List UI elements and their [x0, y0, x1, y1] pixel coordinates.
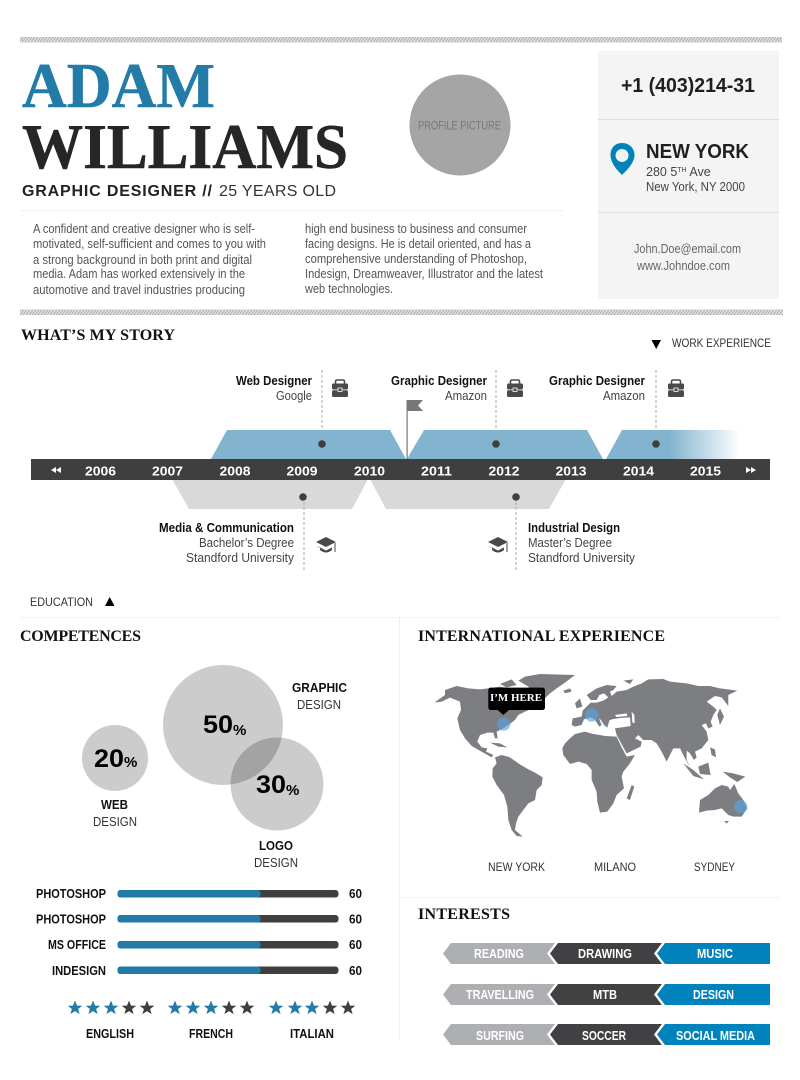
world map [434, 674, 747, 837]
job: graphic designer 2: Amazon [603, 389, 645, 403]
education: media and communication: Bachelor’s Degree [199, 536, 294, 550]
city: NEW YORK [646, 141, 750, 163]
icon: briefcase [507, 380, 523, 397]
skill bars: PHOTOSHOP [36, 912, 106, 926]
interests row 3: SURFING [476, 1029, 524, 1043]
education: industrial design: Master’s Degree [528, 536, 612, 550]
bubble chart: competences: GRAPHIC [292, 681, 347, 695]
map labels [488, 860, 735, 874]
intro text right column: facing designs. He is detail oriented, and has a [305, 237, 531, 251]
map labels: MILANO [594, 860, 636, 874]
intro text right column: comprehensive understanding of Photoshop, [305, 252, 527, 266]
heading: competences: COMPETENCES [20, 628, 141, 645]
language ratings: ENGLISH [86, 1027, 134, 1041]
job: web designer: Google [276, 389, 312, 403]
profile picture placeholder [410, 74, 510, 176]
interests row 1 [443, 943, 770, 964]
bubble chart: competences: 30 [256, 771, 286, 799]
bubble chart: competences [82, 665, 347, 870]
job: graphic designer 1: Amazon [445, 389, 487, 403]
interests row 2: DESIGN [693, 988, 734, 1002]
icon: graduation cap [316, 537, 336, 552]
year bar: 2013 [556, 464, 586, 478]
language ratings: FRENCH [189, 1027, 233, 1041]
job: web designer [236, 374, 312, 403]
icon: briefcase [668, 380, 684, 397]
job: graphic designer 2 [549, 374, 645, 403]
top hatched rule [20, 37, 782, 42]
street address: Ave [687, 165, 711, 179]
intro text left column: a strong background in both print and digital [33, 253, 252, 267]
bubble chart: competences: % [233, 722, 246, 739]
intro text right column [304, 222, 543, 296]
year bar: 2010 [354, 464, 385, 478]
street address: 280 5 [646, 165, 677, 179]
interests row 2 [443, 984, 770, 1005]
job title: GRAPHIC DESIGNER // [22, 183, 213, 200]
eurasia [572, 679, 737, 768]
header: name and title [22, 50, 348, 200]
bubble chart: competences: DESIGN [254, 856, 298, 870]
australia [699, 784, 747, 817]
year bar: 2007 [152, 464, 183, 478]
job: web designer: Web Designer [236, 374, 312, 388]
intro text left column: motivated, self-sufficient and comes to you with [33, 237, 266, 251]
bubble chart: competences: DESIGN [297, 698, 341, 712]
skill bars: INDESIGN [52, 964, 106, 978]
interests row 2: TRAVELLING [466, 988, 534, 1002]
legend: education: EDUCATION [30, 595, 93, 609]
interests row 2: MTB [593, 988, 617, 1002]
email: John.Doe@email.com [634, 242, 741, 256]
year bar: 2012 [488, 464, 520, 478]
heading: international experience: INTERNATIONAL EXPERIENCE [418, 628, 665, 645]
skill bars: 60 [349, 938, 362, 952]
bubble chart: competences: % [286, 782, 299, 799]
interests row 3 [443, 1024, 770, 1045]
phone number: +1 (403)214-31 [621, 75, 755, 97]
profile picture placeholder: PROFILE PICTURE [418, 118, 501, 132]
education: industrial design [528, 521, 636, 565]
icon: graduation cap [488, 537, 508, 552]
language ratings: ITALIAN [290, 1027, 334, 1041]
callout: I'm here: I’M HERE [490, 693, 542, 704]
timeline [31, 370, 770, 571]
year bar: 2009 [286, 464, 318, 478]
interests row 1: DRAWING [578, 947, 632, 961]
language ratings [68, 1000, 355, 1041]
last name: WILLIAMS [22, 111, 348, 182]
bubble chart: competences: % [124, 754, 137, 771]
skill bars [36, 887, 362, 978]
map labels: SYDNEY [694, 860, 735, 874]
website: www.Johndoe.com [636, 259, 730, 273]
year bar: 2006 [85, 464, 116, 478]
north america [434, 686, 533, 757]
heading: interests: INTERESTS [418, 906, 510, 923]
bubble chart: competences: DESIGN [93, 815, 137, 829]
intro text left column: A confident and creative designer who is self- [33, 222, 255, 236]
year bar: 2011 [421, 464, 452, 478]
intro text left column: automotive and travel industries producing [33, 283, 245, 297]
second hatched rule [20, 310, 783, 315]
job: graphic designer 2: Graphic Designer [549, 374, 645, 388]
year bar: 2008 [220, 464, 250, 478]
skill bars: 60 [349, 912, 362, 926]
education: media and communication: Standford University [186, 551, 295, 565]
year bar: 2015 [690, 464, 721, 478]
interests row 3: SOCCER [582, 1029, 626, 1043]
work periods [211, 430, 740, 459]
city address: New York, NY 2000 [646, 180, 745, 194]
icon: location pin [610, 143, 634, 175]
intro text right column: web technologies. [304, 282, 393, 296]
intro text right column: Indesign, Dreamweaver, Illustrator and the latest [305, 267, 543, 281]
bubble chart: competences: LOGO [259, 839, 293, 853]
panel: contact details [598, 51, 779, 299]
education: media and communication: Media & Communication [159, 521, 294, 535]
first name: ADAM [22, 50, 215, 121]
south america [492, 755, 543, 837]
skill bars: PHOTOSHOP [36, 887, 106, 901]
interests row 1: MUSIC [697, 947, 733, 961]
interests row 1: READING [474, 947, 524, 961]
skill bars: MS OFFICE [48, 938, 106, 952]
age: 25 YEARS OLD [219, 183, 336, 200]
icon: briefcase [332, 380, 348, 397]
education: industrial design: Standford University [528, 551, 636, 565]
skill bars: 60 [349, 964, 362, 978]
interests row 3: SOCIAL MEDIA [676, 1029, 755, 1043]
bubble chart: competences: 50 [203, 711, 233, 739]
bubble chart: competences: 20 [94, 745, 124, 773]
dashed connectors and dots [299, 370, 660, 571]
skill bars: 60 [349, 887, 362, 901]
africa [562, 732, 635, 813]
intro text right column: high end business to business and consumer [305, 222, 527, 236]
street address: TH [677, 167, 687, 174]
job: graphic designer 1 [391, 374, 487, 403]
year bar: 2014 [623, 464, 655, 478]
icon: flag [406, 400, 423, 459]
education: industrial design: Industrial Design [528, 521, 620, 535]
intro text left column: media. Adam has worked extensively in the [33, 267, 245, 281]
education periods [172, 479, 566, 509]
education: media and communication [159, 521, 295, 565]
intro text left column [33, 222, 266, 297]
map labels: NEW YORK [488, 860, 545, 874]
heading: story: WHAT’S MY STORY [21, 327, 175, 344]
legend: work experience: WORK EXPERIENCE [672, 336, 771, 350]
year bar [31, 459, 770, 480]
bubble chart: competences: WEB [101, 798, 128, 812]
greenland [518, 674, 575, 702]
job: graphic designer 1: Graphic Designer [391, 374, 487, 388]
